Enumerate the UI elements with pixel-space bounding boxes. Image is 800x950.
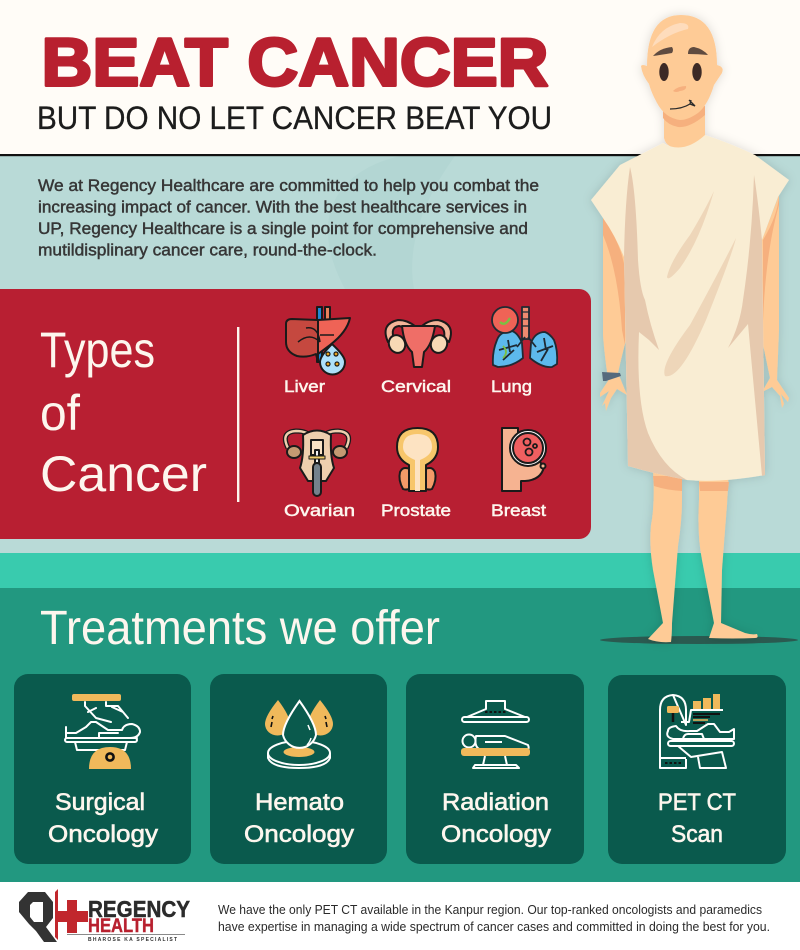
card: surgical oncology xyxy=(14,674,191,864)
icon labels: Breast xyxy=(491,501,546,520)
footer text: have expertise in managing a wide spectrum of cancer cases and committed in doing the best for you. xyxy=(218,919,770,934)
logo: regency health xyxy=(19,889,190,943)
heading: types of cancer: of xyxy=(40,385,80,441)
label: Radiation xyxy=(442,789,549,816)
icon labels: Ovarian xyxy=(284,501,355,520)
label xyxy=(48,789,158,848)
icon labels: Cervical xyxy=(381,377,451,396)
logo: regency health: BHAROSE KA SPECIALIST xyxy=(88,937,177,943)
label xyxy=(244,789,354,848)
floor shadow xyxy=(600,636,798,644)
intro text block: We at Regency Healthcare are committed to help you combat the xyxy=(38,177,539,195)
label: Oncology xyxy=(244,821,354,848)
logo mark xyxy=(19,892,57,942)
label xyxy=(658,789,736,848)
icon: radiation xyxy=(461,701,530,768)
intro text block xyxy=(38,177,539,260)
intro text block: increasing impact of cancer. With the best healthcare services in xyxy=(38,198,527,216)
logo: regency health: HEALTH xyxy=(88,916,154,937)
heading: treatments: Treatments we offer xyxy=(40,602,440,655)
icon labels: Lung xyxy=(491,377,532,396)
heading: types of cancer xyxy=(40,322,207,502)
icon: surgical xyxy=(65,694,140,769)
label: Scan xyxy=(671,821,723,848)
card: radiation oncology xyxy=(406,674,584,864)
icon: lung xyxy=(492,307,557,367)
wristband xyxy=(602,372,621,381)
icon: ovarian xyxy=(285,430,349,496)
icon: pet scanner xyxy=(660,694,734,768)
heading: types of cancer: Types xyxy=(40,322,155,378)
icon labels: Prostate xyxy=(381,501,451,520)
footer text xyxy=(218,902,770,934)
icon: liver xyxy=(286,307,350,374)
card: hemato oncology xyxy=(210,674,387,864)
logo wordmark: REGENCY xyxy=(88,896,190,922)
panel: types of cancer xyxy=(0,289,591,539)
icon: prostate xyxy=(397,428,438,491)
subtitle: BUT DO NO LET CANCER BEAT YOU xyxy=(37,100,552,136)
intro text block: mutildisplinary cancer care, round-the-clock. xyxy=(38,242,377,260)
label xyxy=(441,789,551,848)
icon: drops xyxy=(265,700,333,768)
icon labels: Liver xyxy=(284,377,325,396)
head and neck xyxy=(664,108,705,149)
heading: types of cancer: Cancer xyxy=(40,446,207,502)
icon labels xyxy=(284,377,546,520)
legs and arms xyxy=(600,195,789,642)
label: PET CT xyxy=(658,789,736,816)
footer text: We have the only PET CT available in the Kanpur region. Our top-ranked oncologists and paramedics xyxy=(218,902,762,917)
intro text block: UP, Regency Healthcare is a single point for comprehensive and xyxy=(38,220,528,238)
label: Hemato xyxy=(255,789,344,816)
icon: cervical xyxy=(386,320,451,367)
card: pet ct scan xyxy=(608,675,786,864)
icon: breast xyxy=(502,428,546,491)
gown xyxy=(591,135,789,481)
title: BEAT CANCER xyxy=(42,24,548,100)
patient figure xyxy=(591,15,798,644)
label: Oncology xyxy=(48,821,158,848)
label: Surgical xyxy=(55,789,145,816)
label: Oncology xyxy=(441,821,551,848)
